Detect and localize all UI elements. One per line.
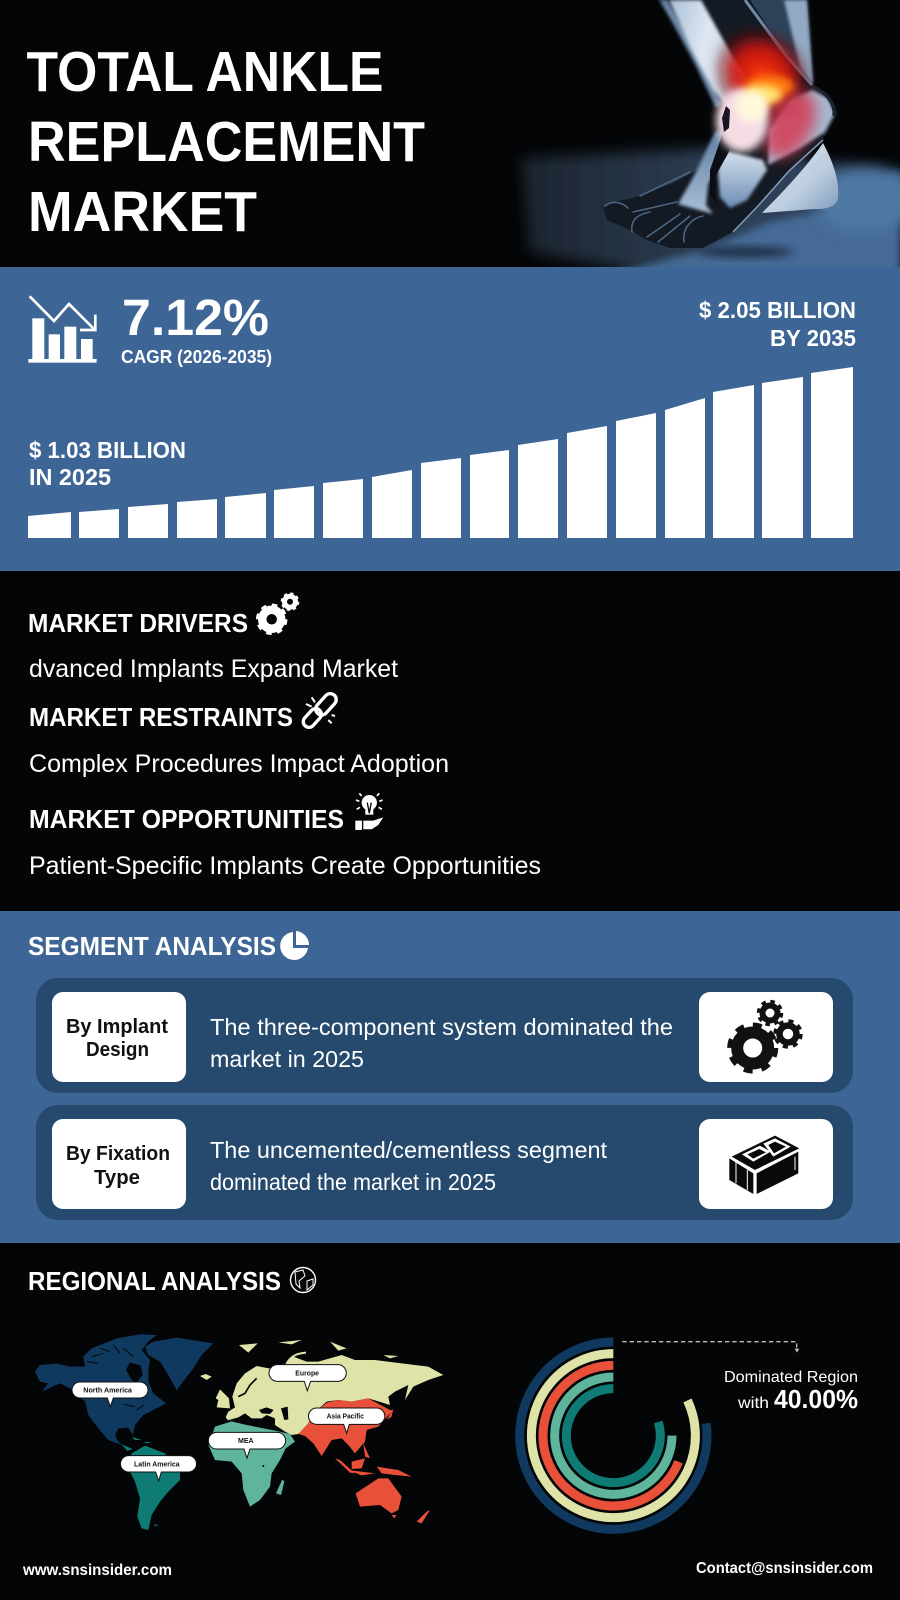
heading: market drivers: MARKET DRIVERS [28, 608, 248, 638]
title: REPLACEMENT [28, 110, 425, 174]
label: By Fixation [66, 1143, 170, 1165]
end value: BY 2035 [770, 325, 856, 351]
panel: market dynamics [28, 594, 541, 880]
end value: $ 2.05 BILLION [699, 297, 856, 323]
callout: Latin America: Latin America [134, 1461, 180, 1468]
label [66, 1016, 168, 1061]
back leg [750, 0, 813, 85]
bar chart [28, 367, 853, 538]
shin highlight [669, 0, 753, 107]
label [66, 1143, 170, 1189]
leg edge bands [660, 0, 823, 232]
heading: SEGMENT ANALYSIS [28, 931, 276, 961]
title [26, 40, 425, 244]
seas [227, 1378, 288, 1427]
radial bar chart [520, 1342, 707, 1529]
driver text: dvanced Implants Expand Market [29, 655, 398, 683]
description: The uncemented/cementless segment [210, 1137, 608, 1163]
dominated region callout [724, 1369, 858, 1414]
region: North America [35, 1334, 213, 1448]
icon: gears [730, 1002, 801, 1070]
toes [605, 172, 703, 242]
dominated region callout: 40.00% [774, 1384, 858, 1414]
heel [768, 86, 835, 165]
title: MARKET [28, 180, 257, 244]
pain glow [693, 1, 837, 167]
callout: Latin America [120, 1456, 196, 1481]
callout: MEA [208, 1432, 286, 1458]
icon: growth chart [28, 296, 97, 363]
description: dominated the market in 2025 [210, 1169, 496, 1195]
callout: North America: North America [83, 1387, 132, 1394]
panel: regional analysis [28, 1266, 858, 1530]
label: Design [86, 1039, 149, 1061]
callout: North America [72, 1382, 148, 1407]
CAGR value: 7.12% [122, 289, 269, 346]
heading: market restraints: MARKET RESTRAINTS [29, 702, 293, 732]
description [210, 1137, 608, 1195]
description [210, 1014, 673, 1072]
title: TOTAL ANKLE [26, 40, 384, 104]
callout: Europe [269, 1365, 346, 1391]
panel: market size [0, 267, 900, 571]
footer: website: www.snsinsider.com [22, 1562, 172, 1579]
region: Europe and Russia [200, 1340, 443, 1435]
leader arrow [622, 1342, 799, 1353]
heading: market opportunities: MARKET OPPORTUNITIES [29, 804, 344, 834]
region: Middle East and Africa [208, 1421, 295, 1507]
icon: pie chart [280, 931, 309, 960]
dominated region callout: with [737, 1395, 769, 1412]
dominated region callout: Dominated Region [724, 1369, 858, 1386]
region: Asia Pacific [298, 1398, 430, 1523]
front leg and foot silhouette [603, 0, 835, 248]
callout: Asia Pacific: Asia Pacific [327, 1414, 364, 1421]
icon: broken chain [301, 691, 339, 730]
icon: idea hand [355, 793, 383, 830]
callout: MEA: MEA [238, 1438, 254, 1445]
description: market in 2025 [210, 1046, 364, 1072]
back heel [762, 143, 838, 213]
callout: Europe: Europe [295, 1371, 319, 1378]
start value: $ 1.03 BILLION [29, 437, 186, 463]
footer: contact: Contact@snsinsider.com [696, 1560, 873, 1577]
restraint text: Complex Procedures Impact Adoption [29, 750, 449, 778]
row: by implant design [36, 978, 853, 1093]
callouts [72, 1365, 385, 1481]
end value [699, 297, 856, 351]
region: Latin America [122, 1437, 180, 1530]
label: By Implant [66, 1016, 168, 1038]
icon: gears [258, 594, 298, 633]
description: The three-component system dominated the [210, 1014, 673, 1040]
heading: REGIONAL ANALYSIS [28, 1266, 281, 1296]
icon: globe [290, 1268, 316, 1292]
icon: cement block [729, 1136, 799, 1194]
label: Type [94, 1167, 140, 1189]
floor haze [522, 148, 900, 274]
start value [29, 437, 186, 490]
opportunity text: Patient-Specific Implants Create Opportunities [29, 852, 541, 880]
header photo: ankle x-ray [522, 0, 900, 274]
CAGR label: CAGR (2026-2035) [121, 347, 272, 367]
row: by fixation type [36, 1105, 853, 1220]
start value: IN 2025 [29, 464, 111, 490]
panel: segment analysis [0, 911, 900, 1243]
world map [35, 1334, 443, 1530]
foot top highlights [678, 130, 767, 214]
callout: Asia Pacific [308, 1408, 385, 1433]
